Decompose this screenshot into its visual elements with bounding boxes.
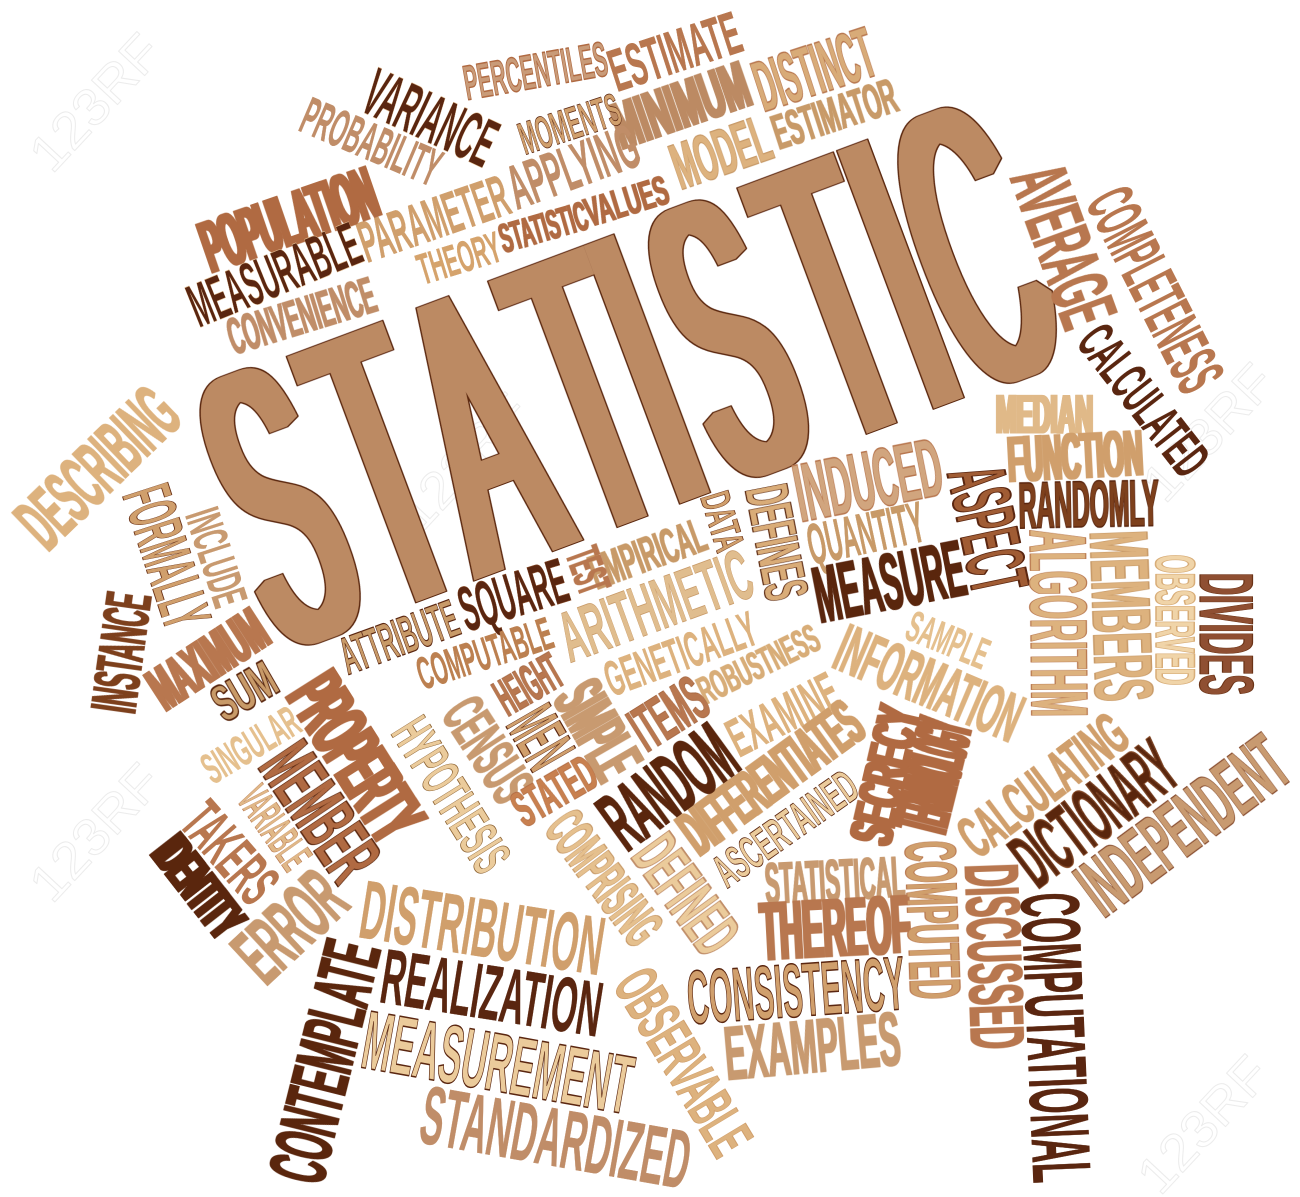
text: FORMALLY — [108, 476, 226, 638]
text: SQUARE — [450, 544, 576, 645]
text: HEIGHT — [484, 642, 573, 727]
watermarks: 123RF — [18, 753, 173, 913]
text: QUANTITY — [801, 490, 930, 578]
word: IDENTITY: IDENTITY — [141, 824, 258, 949]
word: ERROR: ERROR — [215, 852, 365, 1000]
text: COMPRISING — [533, 799, 675, 958]
text: MOMENTS — [512, 83, 627, 165]
text: MEASURE — [806, 523, 972, 640]
word: SINGULAR: SINGULAR — [193, 697, 309, 794]
text: OBSERVED — [1144, 555, 1207, 685]
text: ASPECT — [929, 457, 1047, 601]
word: DATA: DATA — [691, 486, 754, 557]
word: SECRECY: SECRECY — [837, 700, 934, 850]
text: PROPERTY — [270, 658, 442, 857]
text: VARIABLE — [228, 776, 322, 879]
text: ARITHMETIC — [548, 534, 763, 678]
text: THEREOF — [758, 877, 913, 978]
text: CONTEMPLATE — [252, 932, 399, 1191]
text: ALGORITHM — [1012, 529, 1104, 717]
main word: STATISTIC: STATISTIC — [154, 18, 1102, 732]
text: CONVENIENCE — [221, 267, 383, 366]
word: ASCERTAINED: ASCERTAINED — [702, 759, 868, 897]
watermarks: 123RF — [1131, 353, 1286, 513]
word: TAKERS: TAKERS — [167, 789, 292, 917]
text: MODEL — [661, 101, 780, 203]
text: PARAMETER — [350, 162, 518, 275]
text: MEASUREMENT — [356, 993, 640, 1132]
text: DIFFERENTIATES — [665, 686, 877, 868]
text: PROBABILITY — [292, 87, 450, 198]
text: COMPUTABLE — [410, 607, 559, 700]
text: INCLUDE — [175, 502, 257, 614]
text: DIVIDES — [1183, 573, 1268, 695]
text: TERMINOLOGY — [876, 711, 989, 841]
text: MAXIMUM — [136, 595, 281, 724]
text: PERCENTILES — [460, 32, 612, 111]
text: MEDIAN — [996, 383, 1093, 445]
text: MEMBER — [243, 727, 398, 897]
word: STATED: STATED — [502, 744, 607, 838]
text: ATTRIBUTE — [332, 589, 467, 686]
watermarks: 123RF — [386, 383, 541, 543]
text: DISTRIBUTION — [354, 863, 611, 993]
main word: STATISTIC: STATISTIC — [154, 18, 1102, 732]
word: THEORY: THEORY — [412, 223, 507, 295]
word: EXAMINE: EXAMINE — [716, 660, 850, 769]
text: INFORMATION — [824, 609, 1034, 757]
watermarks: 123RF — [18, 23, 173, 183]
word: DEFINED: DEFINED — [618, 821, 755, 969]
word: SAMPLE: SAMPLE — [899, 602, 996, 679]
word: CENSUS: CENSUS — [428, 685, 546, 815]
text: POPULATION — [190, 151, 387, 288]
word: VALUES: VALUES — [579, 167, 674, 236]
word: ITEMS: ITEMS — [616, 662, 721, 765]
text: VARIANCE — [352, 54, 509, 182]
text: TEST — [555, 541, 620, 601]
text: REALIZATION — [375, 932, 608, 1054]
word: HYPOTHESIS: HYPOTHESIS — [380, 706, 523, 884]
text: INSTANCE — [77, 588, 166, 717]
text: STATISTIC — [494, 193, 593, 262]
text: STATISTICAL — [763, 845, 906, 917]
text: INDUCED — [787, 420, 950, 540]
text: SIMPLE — [538, 668, 656, 793]
text: DEFINES — [732, 480, 821, 605]
text: CONSISTENCY — [684, 941, 908, 1041]
word: MEN: MEN — [491, 693, 589, 782]
text: AVERAGE — [992, 153, 1134, 339]
text: APPLYING — [498, 111, 649, 223]
text: EMPIRICAL — [582, 509, 714, 600]
text: EXAMPLES — [721, 997, 904, 1097]
text: MEASURABLE — [178, 210, 371, 341]
word: ROBUSTNESS: ROBUSTNESS — [691, 617, 827, 713]
text: DESCRIBING — [0, 369, 196, 565]
text: ESTIMATOR — [765, 68, 904, 160]
text: MEMBERS — [1072, 529, 1171, 703]
text: GENETICALLY — [597, 601, 764, 707]
text: RANDOM — [582, 706, 755, 868]
word: SUM: SUM — [202, 651, 287, 733]
